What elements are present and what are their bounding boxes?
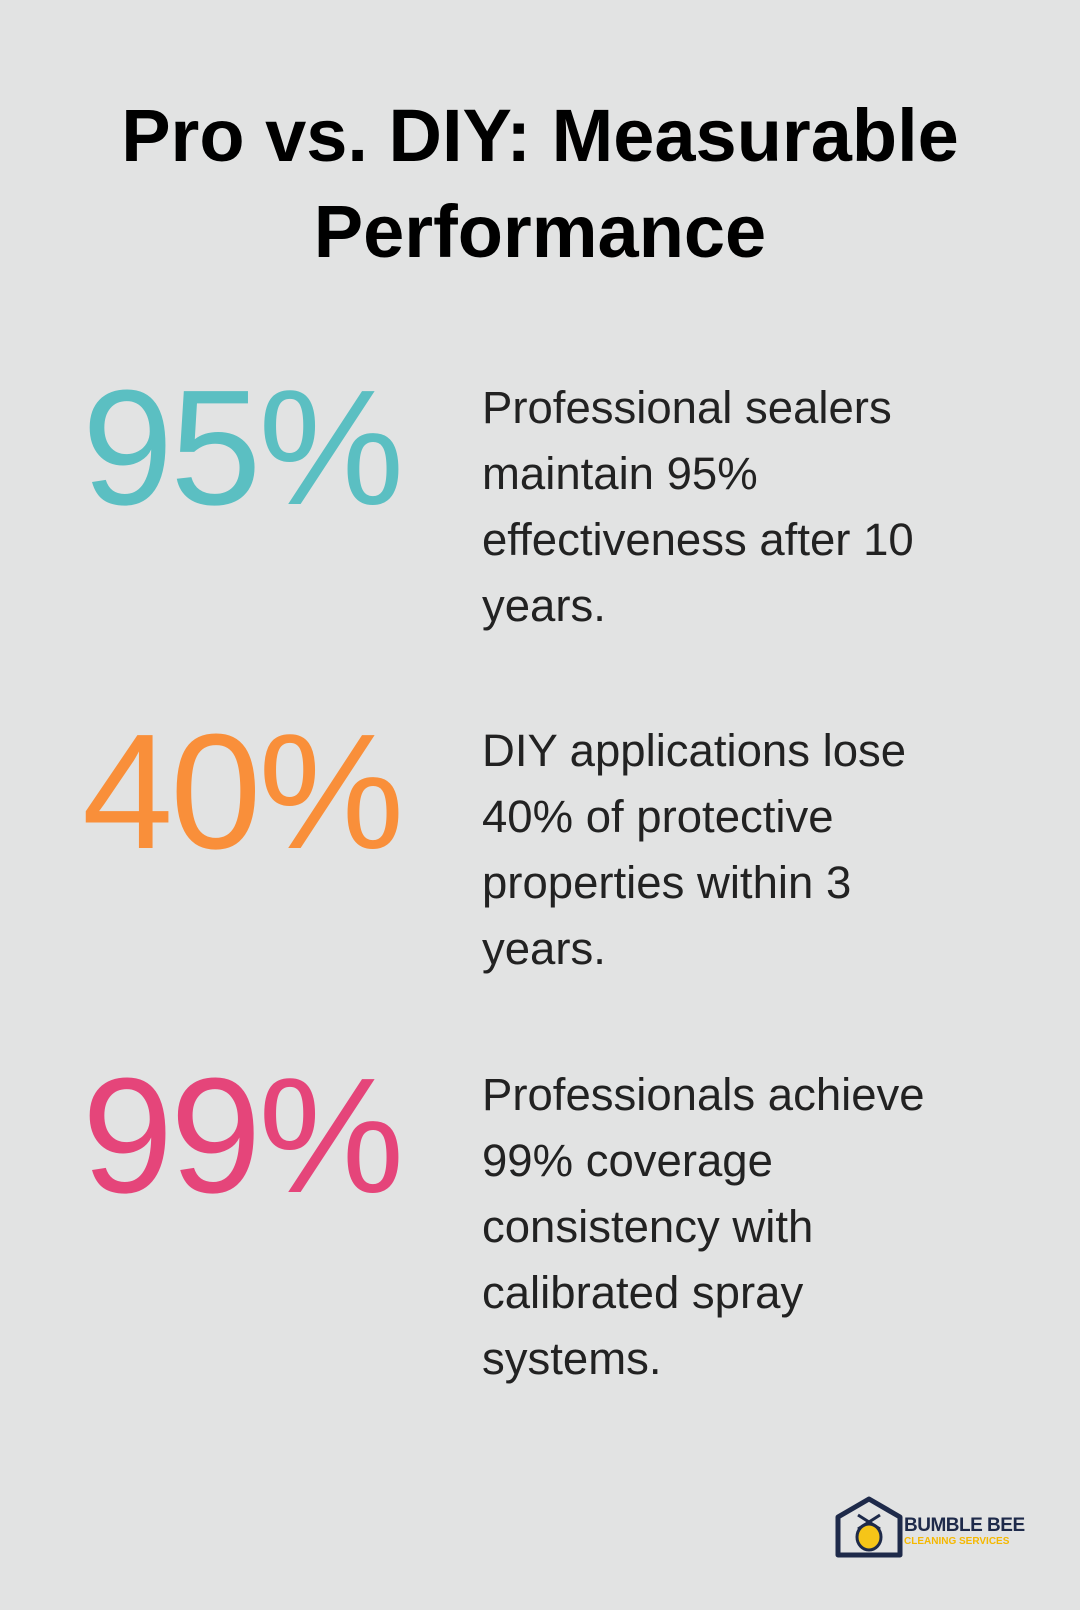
stat 1 number: 95% <box>82 356 401 539</box>
stat 2 number: 40% <box>82 700 401 883</box>
stat 1 text: maintain 95% <box>482 448 758 499</box>
title: Performance <box>314 190 766 273</box>
title: Pro vs. DIY: Measurable <box>121 94 959 177</box>
stat 2 text <box>482 725 906 974</box>
logo: BUMBLE BEE <box>904 1515 1025 1536</box>
stat 2 text: properties within 3 <box>482 857 851 908</box>
stat 1 text <box>482 382 914 631</box>
stat 1 text: years. <box>482 580 606 631</box>
stat 2 text: 40% of protective <box>482 791 834 842</box>
stat 3 text: 99% coverage <box>482 1135 773 1186</box>
title <box>121 94 959 273</box>
logo: CLEANING SERVICES <box>904 1536 1009 1547</box>
stat 3 text: systems. <box>482 1333 662 1384</box>
stat 3 number: 99% <box>82 1044 401 1227</box>
stat 3 text: Professionals achieve <box>482 1069 925 1120</box>
stat 3 text: calibrated spray <box>482 1267 803 1318</box>
stat 2 text: years. <box>482 923 606 974</box>
stat 3 text: consistency with <box>482 1201 813 1252</box>
stat 2 text: DIY applications lose <box>482 725 906 776</box>
stat 1 text: effectiveness after 10 <box>482 514 914 565</box>
logo <box>836 1496 1025 1558</box>
stat 1 text: Professional sealers <box>482 382 892 433</box>
stat 3 text <box>482 1069 925 1384</box>
